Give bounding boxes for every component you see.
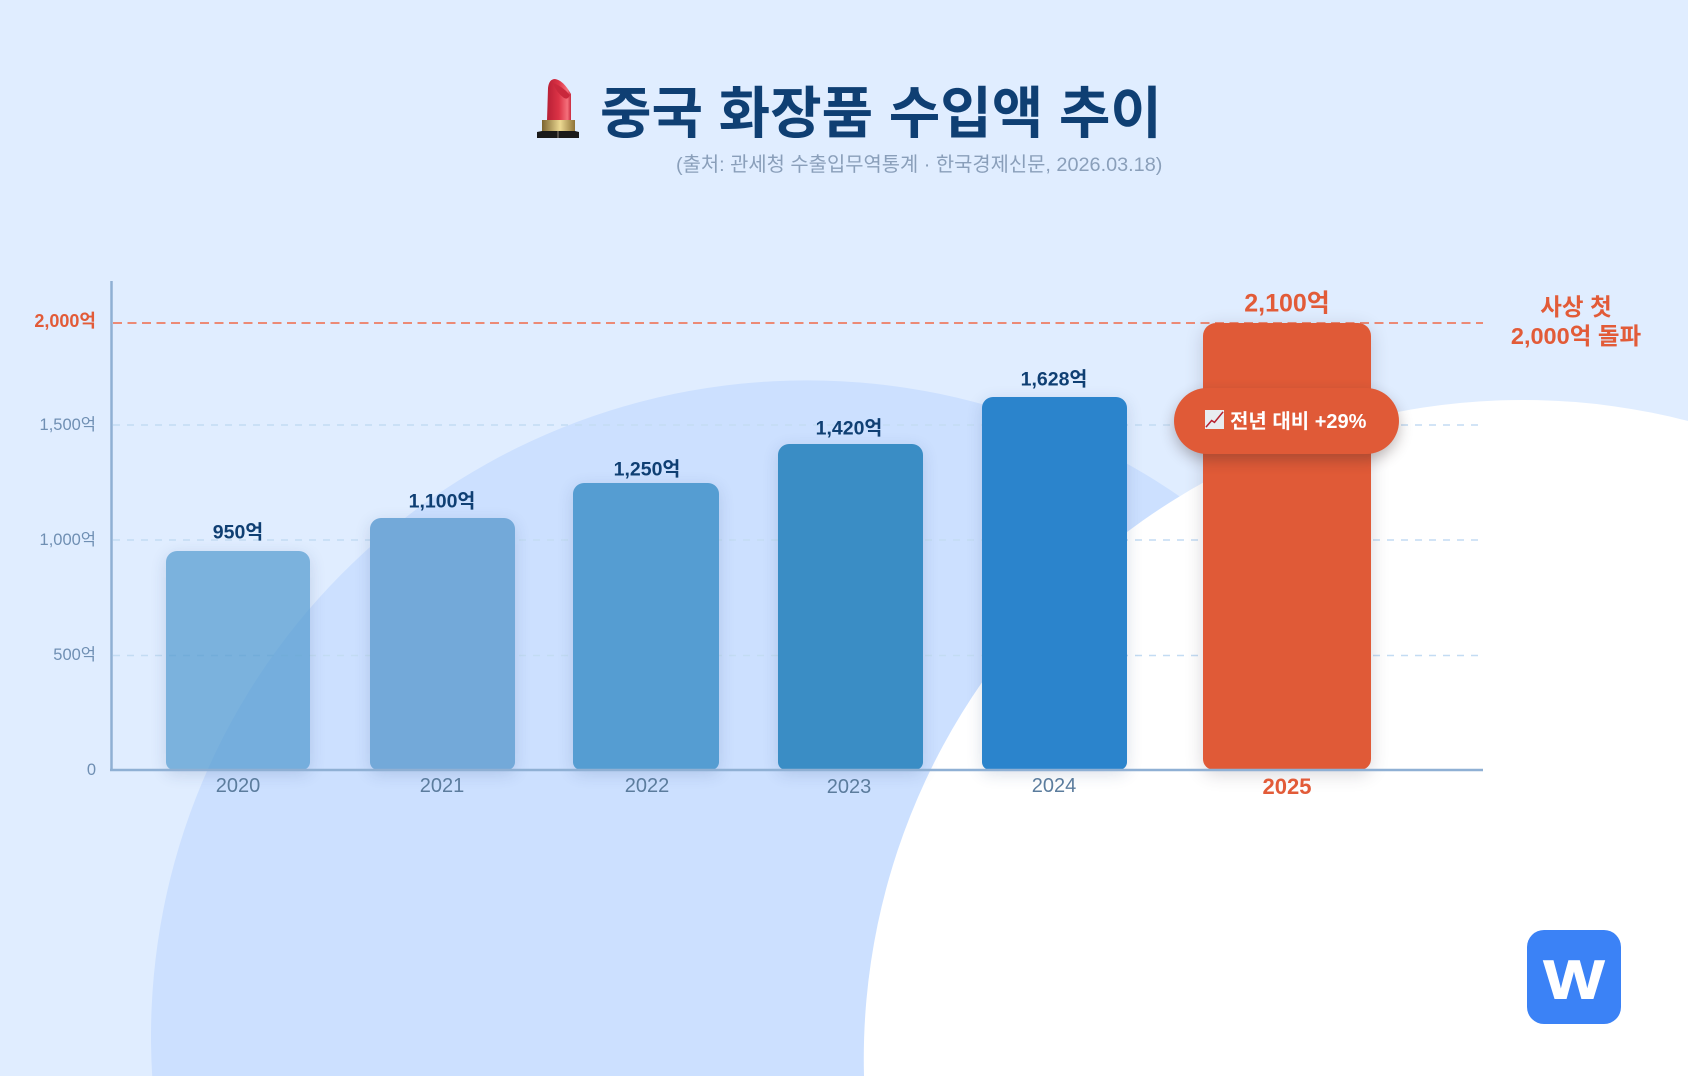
bar 2023 [778,444,923,770]
y axis labels: 2,000억 [34,311,96,331]
value labels: 1,250억 [614,458,680,480]
y axis labels: 500억 [53,646,96,664]
icon: lipstick [537,79,579,138]
year labels [216,774,1311,799]
icon: chart increasing [1205,410,1224,429]
bar 2022 [573,483,719,770]
value labels: 1,628억 [1021,368,1087,390]
value labels: 1,420억 [816,417,882,439]
y axis labels [34,311,96,779]
logo: W: W [1544,948,1605,1010]
axes lines [110,281,1483,772]
year labels: 2024 [1032,775,1076,797]
title: 중국 화장품 수입액 추이 [600,82,1162,145]
annotation: record high: 사상 첫 [1540,294,1612,320]
year labels: 2023 [827,776,871,798]
callout pill: year over year [1174,388,1399,454]
year labels: 2022 [625,775,669,797]
subtitle: source: (출처: 관세청 수출입무역통계 · 한국경제신문, 2026.03.18) [676,154,1162,176]
year labels: 2021 [420,775,464,797]
annotation: record high [1511,294,1641,349]
bar 2024 [982,397,1127,770]
annotation: record high: 2,000억 돌파 [1511,323,1641,349]
bar 2021 [370,518,515,770]
bar 2025 [1203,323,1371,770]
y axis labels: 1,000억 [40,531,96,549]
pill text: 전년 대비 +29% [1230,411,1366,433]
year labels: 2025 [1263,774,1311,799]
value labels: 2,100억 [1244,290,1330,318]
value labels: 1,100억 [409,490,475,512]
y axis labels: 0 [87,761,96,779]
y axis labels: 1,500억 [40,416,96,434]
value labels: 950억 [213,521,263,543]
gridlines [113,322,1483,656]
value labels [213,290,1330,543]
year labels: 2020 [216,775,260,797]
chart [34,281,1641,799]
logo: W [1527,930,1621,1024]
bar 2020 [166,551,310,770]
